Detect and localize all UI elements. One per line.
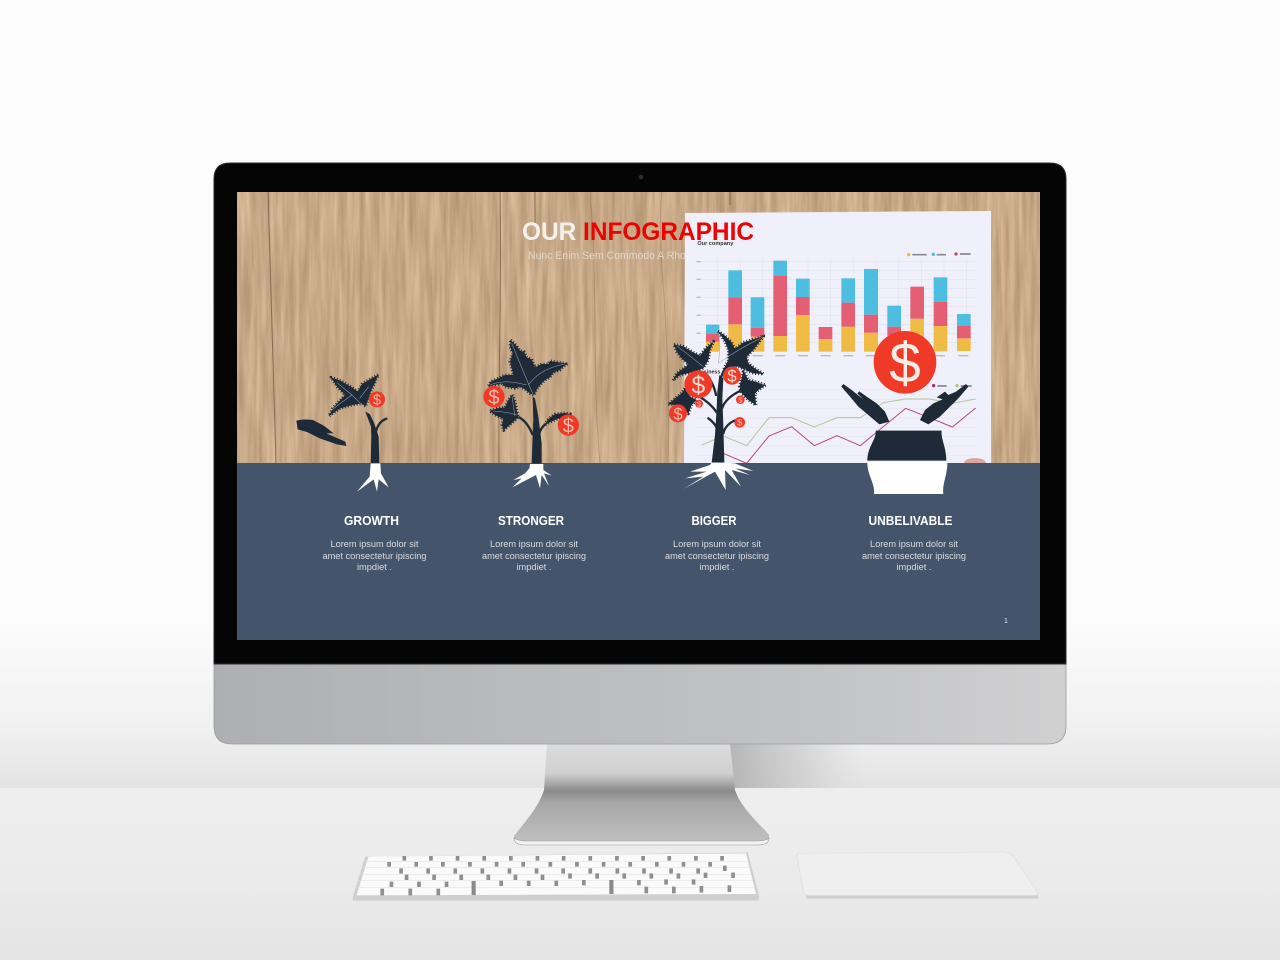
coins	[669, 367, 745, 428]
leaves and stem	[488, 340, 570, 463]
column: bigger	[665, 514, 769, 572]
column: unbelivable: amet consectetur ipiscing	[862, 551, 966, 561]
column: stronger: Lorem ipsum dolor sit	[490, 539, 578, 549]
column: growth: GROWTH	[344, 514, 399, 528]
stage 2: stronger plant	[483, 340, 579, 488]
ground band	[237, 463, 1040, 640]
column: bigger: BIGGER	[692, 514, 736, 528]
paper heading: Our company	[697, 241, 733, 247]
bar chart legend	[907, 252, 971, 256]
stand shadow on wall	[730, 744, 870, 788]
coins: $	[691, 372, 705, 399]
hand in photo	[964, 458, 986, 468]
column: growth: Lorem ipsum dolor sit	[330, 539, 419, 549]
stage 3: bigger plant	[668, 331, 766, 490]
pot	[867, 431, 947, 494]
monitor bezel	[214, 163, 1066, 664]
keyboard	[353, 853, 759, 901]
column: unbelivable: impdiet .	[896, 562, 932, 572]
column: stronger: amet consectetur ipiscing	[482, 551, 586, 561]
coins: $	[737, 418, 743, 428]
coins: $	[727, 367, 737, 386]
monitor chin	[214, 660, 1066, 744]
coins: $	[563, 415, 574, 437]
large dollar coin	[874, 331, 936, 396]
stage 4: unbelivable pot and hands	[841, 331, 968, 494]
right hand	[920, 384, 968, 424]
line chart legend	[932, 384, 972, 387]
wood background	[237, 192, 1040, 464]
camera	[639, 175, 643, 179]
column: unbelivable: Lorem ipsum dolor sit	[870, 539, 958, 549]
column: bigger: impdiet .	[700, 562, 734, 572]
stage 1: growth plant	[296, 375, 389, 492]
coin: $	[373, 393, 381, 409]
column: growth: amet consectetur ipiscing	[322, 551, 426, 561]
desk surface	[0, 788, 1280, 960]
column: growth	[322, 514, 426, 572]
leaves and trunk	[668, 331, 766, 463]
second chart heading: Business	[697, 370, 720, 376]
roots	[512, 464, 552, 488]
coins: $	[738, 395, 743, 404]
subtitle: Nunc Enim Sem Commodo A Rhoncus	[528, 250, 708, 262]
coins: $	[488, 387, 500, 409]
roots	[683, 463, 753, 490]
monitor	[214, 163, 1066, 744]
roots	[357, 463, 389, 492]
column: bigger: amet consectetur ipiscing	[665, 551, 769, 561]
leaves and stem	[329, 375, 386, 463]
column: unbelivable	[862, 514, 966, 572]
trackpad	[797, 852, 1038, 899]
column: bigger: Lorem ipsum dolor sit	[673, 539, 761, 549]
page number: 1	[1004, 618, 1008, 625]
report paper with charts	[684, 211, 991, 468]
coins	[483, 386, 579, 437]
large dollar coin: $	[889, 333, 921, 396]
left hand	[841, 384, 889, 424]
column: growth: impdiet .	[357, 562, 392, 572]
line chart	[697, 389, 977, 463]
coins: $	[697, 399, 701, 408]
column: stronger: STRONGER	[498, 514, 564, 528]
hand	[296, 419, 346, 446]
stacked bar chart	[697, 258, 977, 356]
monitor stand	[514, 743, 769, 845]
column: stronger	[482, 514, 586, 572]
column: stronger: impdiet .	[516, 562, 552, 572]
title: OUR INFOGRAPHIC	[522, 218, 754, 246]
column: unbelivable: UNBELIVABLE	[868, 514, 952, 528]
coins: $	[673, 404, 683, 423]
slide screen	[237, 192, 1040, 640]
